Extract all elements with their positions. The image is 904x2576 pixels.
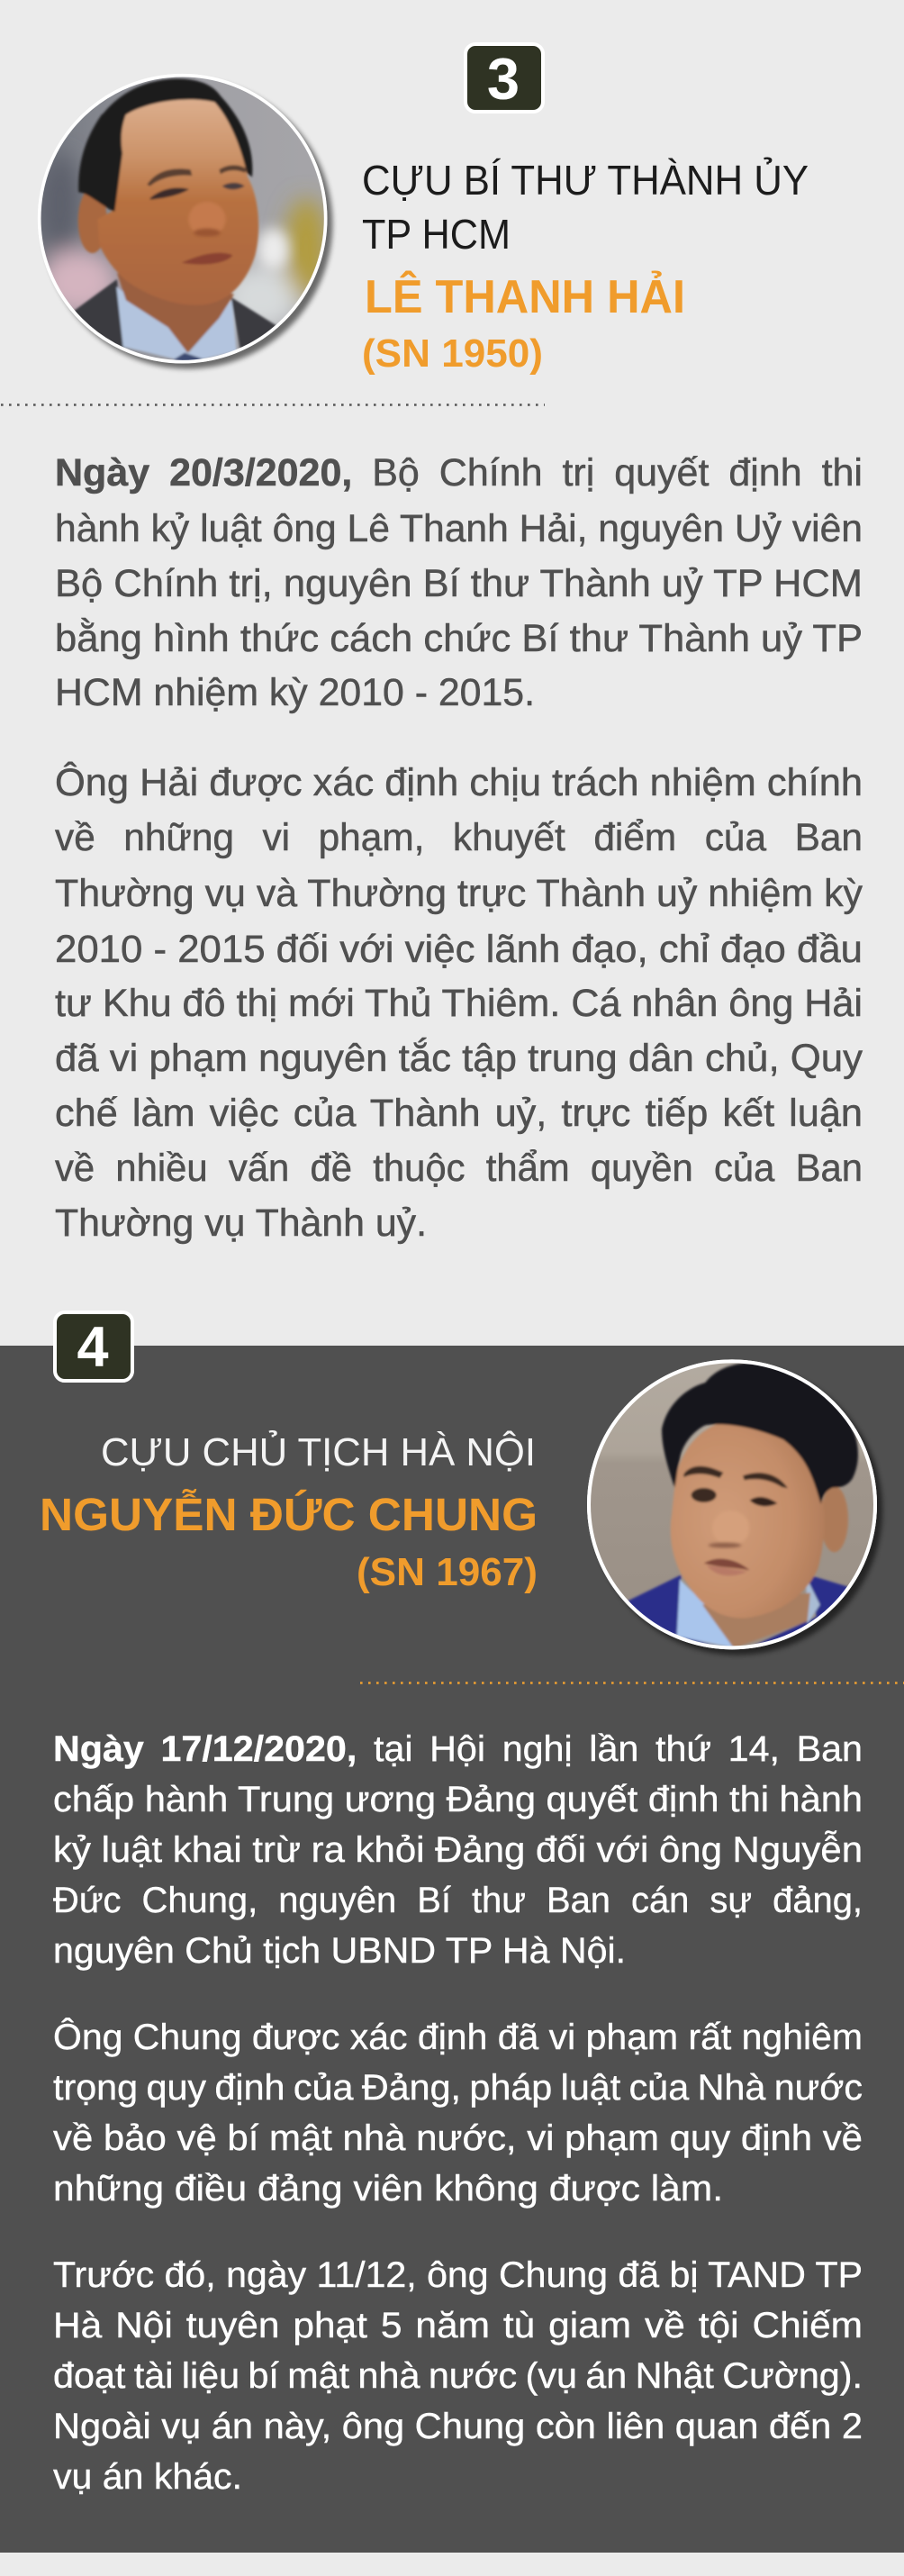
- ear: [820, 1486, 848, 1552]
- shirt collar: [677, 1579, 734, 1648]
- text block: paragraph 1: bằng hình thức cách chức Bí thư Thành uỷ TP: [55, 617, 863, 660]
- mouth: [182, 253, 232, 265]
- mouth: [704, 1559, 750, 1570]
- text block: paragraph 2: [55, 761, 863, 1245]
- number badge 3: 3: [487, 46, 520, 112]
- ear: [78, 188, 107, 253]
- text block: paragraph 2: Thường vụ và Thường trực Thành uỷ nhiệm kỳ: [55, 872, 863, 915]
- title: former HCMC party secretary: [362, 157, 809, 258]
- text block: paragraph 2: về bảo vệ bí mật nhà nước, vi phạm quy định về: [53, 2118, 863, 2158]
- collar: [116, 286, 237, 358]
- text block: paragraph 1: kỷ luật khai trừ ra khỏi Đảng đối với ông Nguyễn: [53, 1829, 863, 1870]
- neck: [702, 1592, 810, 1648]
- number badge 4: [55, 1312, 132, 1381]
- brows and eyes: [147, 168, 192, 186]
- text block: paragraph 3: [53, 2255, 863, 2497]
- panel: person 4, Nguyễn Đức Chung: [0, 1312, 904, 2553]
- text block: paragraph 1: [53, 1729, 863, 1971]
- name: Nguyễn Đức Chung: NGUYỄN ĐỨC CHUNG: [40, 1488, 538, 1540]
- text block: paragraph 2: Ông Hải được xác định chịu trách nhiệm chính: [55, 761, 863, 804]
- text block: paragraph 1: Ngày 17/12/2020, tại Hội nghị lần thứ 14, Ban: [53, 1729, 863, 1769]
- brows and eyes: [683, 1466, 723, 1478]
- text block: paragraph 3: Trước đó, ngày 11/12, ông Chung đã bị TAND TP: [53, 2255, 863, 2295]
- text block: paragraph 2: đã vi phạm nguyên tắc tập trung dân chủ, Quy: [55, 1037, 863, 1080]
- title: former HCMC party secretary: CỰU BÍ THƯ THÀNH ỦY: [362, 157, 809, 204]
- text block: paragraph 1: nguyên Chủ tịch UBND TP Hà Nội.: [53, 1931, 626, 1971]
- text block: paragraph 1: [55, 451, 863, 714]
- text block: paragraph 1: chấp hành Trung ương Đảng quyết định thi hành: [53, 1780, 863, 1819]
- panel: person 3, Lê Thanh Hải: [1, 44, 863, 1245]
- portrait: Nguyễn Đức Chung: [585, 1356, 882, 1655]
- face: [671, 1421, 824, 1619]
- name: Lê Thanh Hải: LÊ THANH HẢI: [365, 270, 685, 323]
- text block: paragraph 2: [53, 2017, 863, 2209]
- text block: paragraph 3: Ngoài vụ án này, ông Chung còn liên quan đến 2: [53, 2407, 863, 2446]
- text block: paragraph 3: Hà Nội tuyên phạt 5 năm tù giam về tội Chiếm: [53, 2306, 863, 2345]
- title: former Hanoi chairman: CỰU CHỦ TỊCH HÀ NỘI: [101, 1429, 536, 1474]
- text block: paragraph 2: những điều đảng viên không được làm.: [53, 2169, 723, 2209]
- text block: paragraph 1: Ngày 20/3/2020, Bộ Chính trị quyết định thi: [55, 451, 863, 494]
- portrait: Lê Thanh Hải: [36, 72, 332, 372]
- number badge 3: [466, 44, 543, 112]
- text block: paragraph 1: HCM nhiệm kỳ 2010 - 2015.: [55, 671, 535, 714]
- text block: paragraph 2: Ông Chung được xác định đã vi phạm rất nghiêm: [53, 2017, 863, 2057]
- title: former HCMC party secretary: TP HCM: [362, 211, 511, 258]
- neck: [117, 273, 234, 353]
- birth year 1950: (SN 1950): [362, 331, 543, 376]
- dark panel background: [0, 1346, 904, 2553]
- hair: [662, 1363, 858, 1504]
- text block: paragraph 3: vụ án khác.: [53, 2457, 242, 2497]
- text block: paragraph 2: về nhiều vấn đề thuộc thẩm quyền của Ban: [55, 1147, 863, 1190]
- text block: paragraph 3: đoạt tài liệu bí mật nhà nước (vụ án Nhật Cường).: [53, 2356, 863, 2396]
- jacket: [628, 1574, 848, 1645]
- birth year 1967: (SN 1967): [357, 1550, 538, 1594]
- face: [97, 99, 258, 305]
- hair: [78, 78, 252, 212]
- text block: paragraph 2: về những vi phạm, khuyết điểm của Ban: [55, 816, 863, 859]
- text block: paragraph 1: Đức Chung, nguyên Bí thư Ban cán sự đảng,: [53, 1881, 863, 1920]
- text block: paragraph 2: 2010 - 2015 đối với việc lãnh đạo, chỉ đạo đầu: [55, 928, 863, 971]
- text block: paragraph 1: Bộ Chính trị, nguyên Bí thư Thành uỷ TP HCM: [55, 562, 863, 605]
- number badge 4: 4: [77, 1316, 109, 1379]
- text block: paragraph 2: chế làm việc của Thành uỷ, trực tiếp kết luận: [55, 1092, 863, 1135]
- text block: paragraph 1: hành kỷ luật ông Lê Thanh Hải, nguyên Uỷ viên: [55, 507, 863, 550]
- text block: paragraph 2: trọng quy định của Đảng, pháp luật của Nhà nước: [53, 2068, 863, 2108]
- text block: paragraph 2: tư Khu đô thị mới Thủ Thiêm. Cá nhân ông Hải: [55, 982, 863, 1025]
- suit: [74, 278, 277, 348]
- text block: paragraph 2: Thường vụ Thành uỷ.: [55, 1202, 427, 1245]
- tie: [173, 351, 203, 360]
